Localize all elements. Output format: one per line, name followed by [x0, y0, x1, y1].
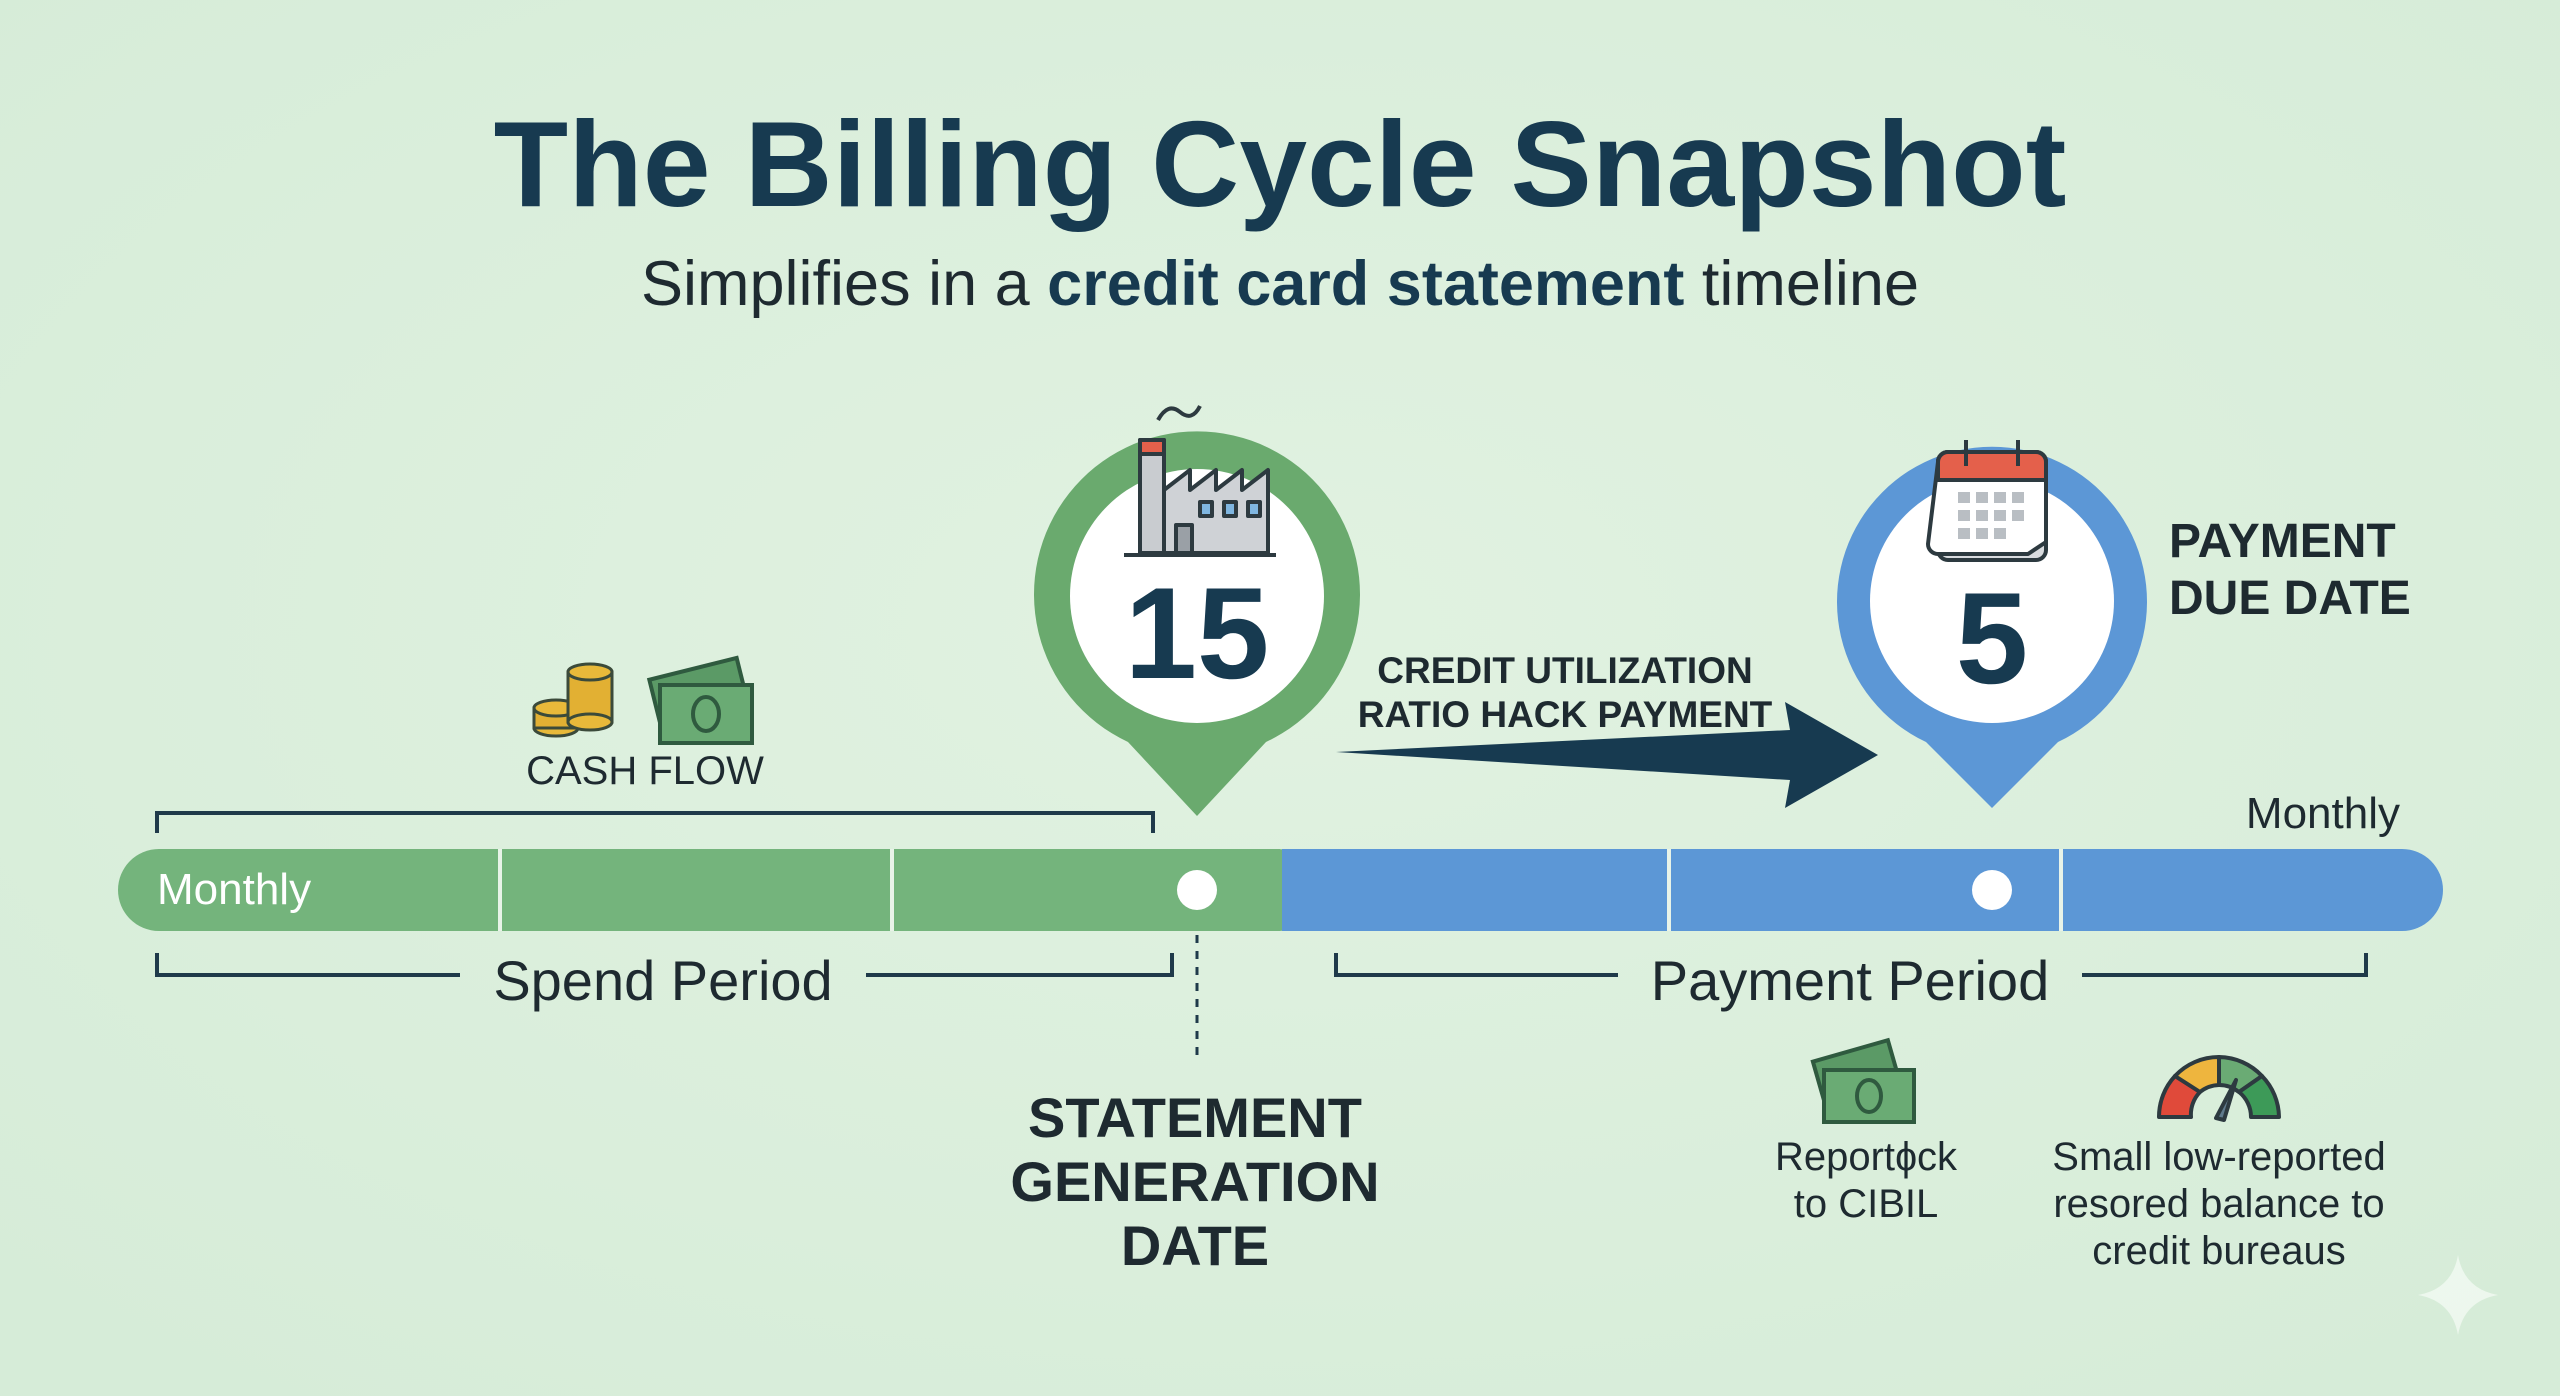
icon: sparkle [2418, 1255, 2498, 1335]
icon: calendar [1928, 440, 2046, 560]
timeline bar: Monthly [157, 865, 311, 914]
icon: gauge [2159, 1057, 2279, 1120]
pin: payment due 5 [1837, 447, 2147, 808]
arrow: credit utilization [1336, 702, 1878, 808]
label: statement generation date: STATEMENT [1028, 1086, 1362, 1149]
pin: payment due 5: 5 [1956, 565, 2028, 711]
label: small low-reported balance: resored balance to [2053, 1182, 2385, 1226]
label: payment due date: PAYMENT [2169, 515, 2396, 568]
label: statement generation date: DATE [1121, 1214, 1269, 1277]
label: report to CIBIL: Reportɸck [1775, 1135, 1958, 1179]
timeline bar [118, 849, 2443, 931]
icon: bills (report) [1813, 1040, 1914, 1122]
title: The Billing Cycle Snapshot [494, 96, 2066, 232]
icon: factory [1124, 406, 1276, 555]
dashed connector [1196, 935, 1198, 1062]
arrow label: RATIO HACK PAYMENT [1358, 694, 1773, 735]
pin: statement date 15: 15 [1125, 560, 1269, 706]
label: monthly right: Monthly [2246, 789, 2400, 838]
label: small low-reported balance: credit bureaus [2092, 1229, 2346, 1273]
label: small low-reported balance: Small low-reported [2052, 1135, 2386, 1179]
icon: cash flow coins and bills [534, 658, 752, 743]
label: cash flow: CASH FLOW [526, 749, 764, 793]
label: report to CIBIL: to CIBIL [1794, 1182, 1938, 1226]
subtitle: Simplifies in a credit card statement timeline [641, 249, 1919, 319]
bracket: payment period: Payment Period [1651, 949, 2049, 1012]
bracket: spend period [157, 949, 1172, 1012]
bracket: spend period: Spend Period [493, 949, 833, 1012]
pin: statement date 15 [1034, 431, 1360, 816]
arrow label: CREDIT UTILIZATION [1377, 650, 1753, 691]
bracket: payment period [1336, 949, 2366, 1012]
label: statement generation date: GENERATION [1010, 1150, 1380, 1213]
label: payment due date: DUE DATE [2169, 572, 2411, 625]
bracket: top spend [157, 813, 1153, 833]
